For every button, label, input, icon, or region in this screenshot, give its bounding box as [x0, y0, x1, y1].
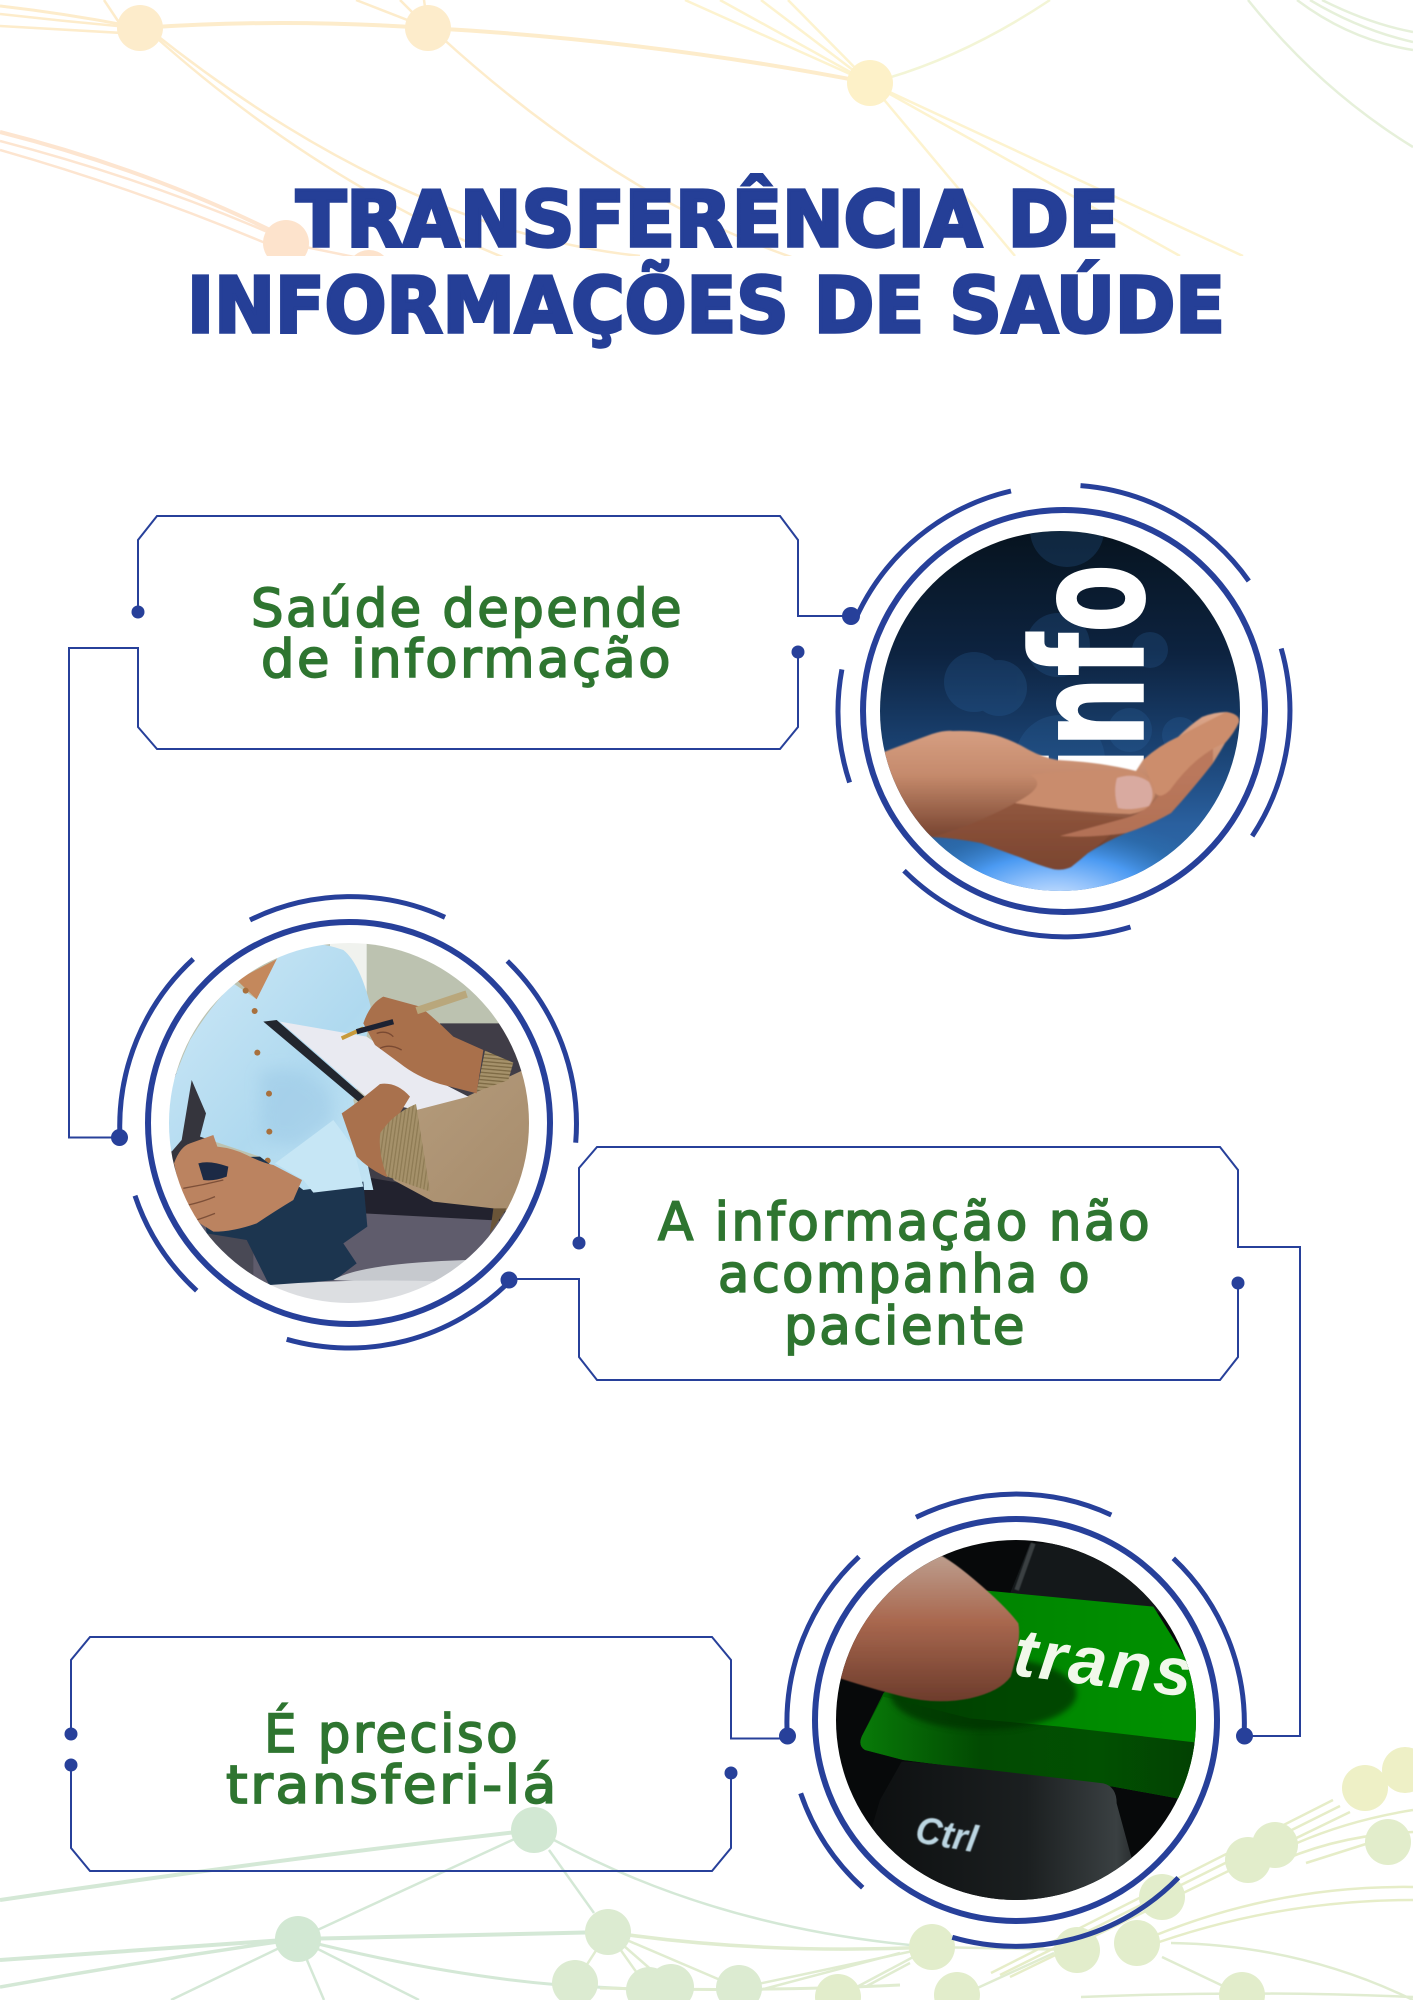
- title: INFORMAÇÕES DE SAÚDE: [187, 260, 1225, 351]
- title: [187, 175, 1225, 351]
- transfer text: transf: [1010, 1614, 1229, 1716]
- trousers: [197, 1157, 367, 1287]
- hand: [860, 712, 1239, 870]
- shirt: [163, 943, 373, 1190]
- pillow foreground: [334, 1260, 466, 1282]
- ctrl key: [872, 1762, 1132, 1900]
- outer arcs: [120, 897, 576, 1348]
- text: é preciso transferi-lá: [226, 1702, 559, 1816]
- text: é preciso transferi-lá: É preciso: [264, 1702, 520, 1765]
- pen: [342, 1028, 363, 1038]
- photo: green transfer key: [836, 1540, 1196, 1900]
- title: TRANSFERÊNCIA DE: [296, 175, 1119, 265]
- connector dots: [111, 1129, 518, 1288]
- clasped hands: [174, 1135, 302, 1232]
- lower hand: [342, 1084, 410, 1177]
- text: saúde depende de informação: de informação: [261, 629, 673, 690]
- text: a informação não acompanha o paciente: A informação não: [658, 1192, 1152, 1253]
- upper hand: [363, 997, 483, 1093]
- text: a informação não acompanha o paciente: acompanha o: [718, 1244, 1092, 1305]
- info text: info: [1001, 564, 1180, 782]
- text: a informação não acompanha o paciente: paciente: [784, 1296, 1027, 1357]
- sweater: [393, 1070, 537, 1217]
- skin at neck: [237, 958, 278, 999]
- photo: hand with info text: [880, 531, 1240, 891]
- photo: green transfer key: Ctrl: [912, 1808, 982, 1861]
- text: é preciso transferi-lá: transferi-lá: [226, 1755, 559, 1816]
- panel: é preciso transferi-lá: [64, 1637, 787, 1871]
- box outline 3 with connectors: [64, 1637, 787, 1871]
- sweater cuff lower: [380, 1104, 430, 1192]
- text: saúde depende de informação: [251, 578, 684, 690]
- box outline 2 with connectors: [509, 1147, 1300, 1736]
- panel: a informação não acompanha o paciente: [509, 1147, 1300, 1736]
- outer arcs: [787, 1494, 1244, 1946]
- circle image 1: hand holding info: [838, 486, 1290, 995]
- sweater cuff upper: [477, 1051, 513, 1092]
- green key: [860, 1590, 1203, 1803]
- background: bottom network pattern: [0, 1747, 1413, 2000]
- clipboard paper: [280, 1022, 468, 1110]
- text: a informação não acompanha o paciente: [658, 1192, 1152, 1357]
- outer arcs: [838, 486, 1290, 937]
- connector dot: [842, 607, 860, 625]
- connector dots: [779, 1728, 1253, 1744]
- circle image 3: finger pressing transfer key: [779, 1494, 1253, 1946]
- finger: [830, 1555, 1019, 1701]
- box outline 1 with connectors: [69, 516, 851, 1138]
- shirt cuff: [275, 1120, 363, 1193]
- text: saúde depende de informação: Saúde depende: [251, 578, 684, 640]
- panel: saúde depende de informação: [69, 516, 851, 1138]
- circle image 2: doctor with patient: [111, 897, 576, 1348]
- background: top network pattern: [0, 0, 1413, 256]
- photo: consultation: [163, 937, 540, 1313]
